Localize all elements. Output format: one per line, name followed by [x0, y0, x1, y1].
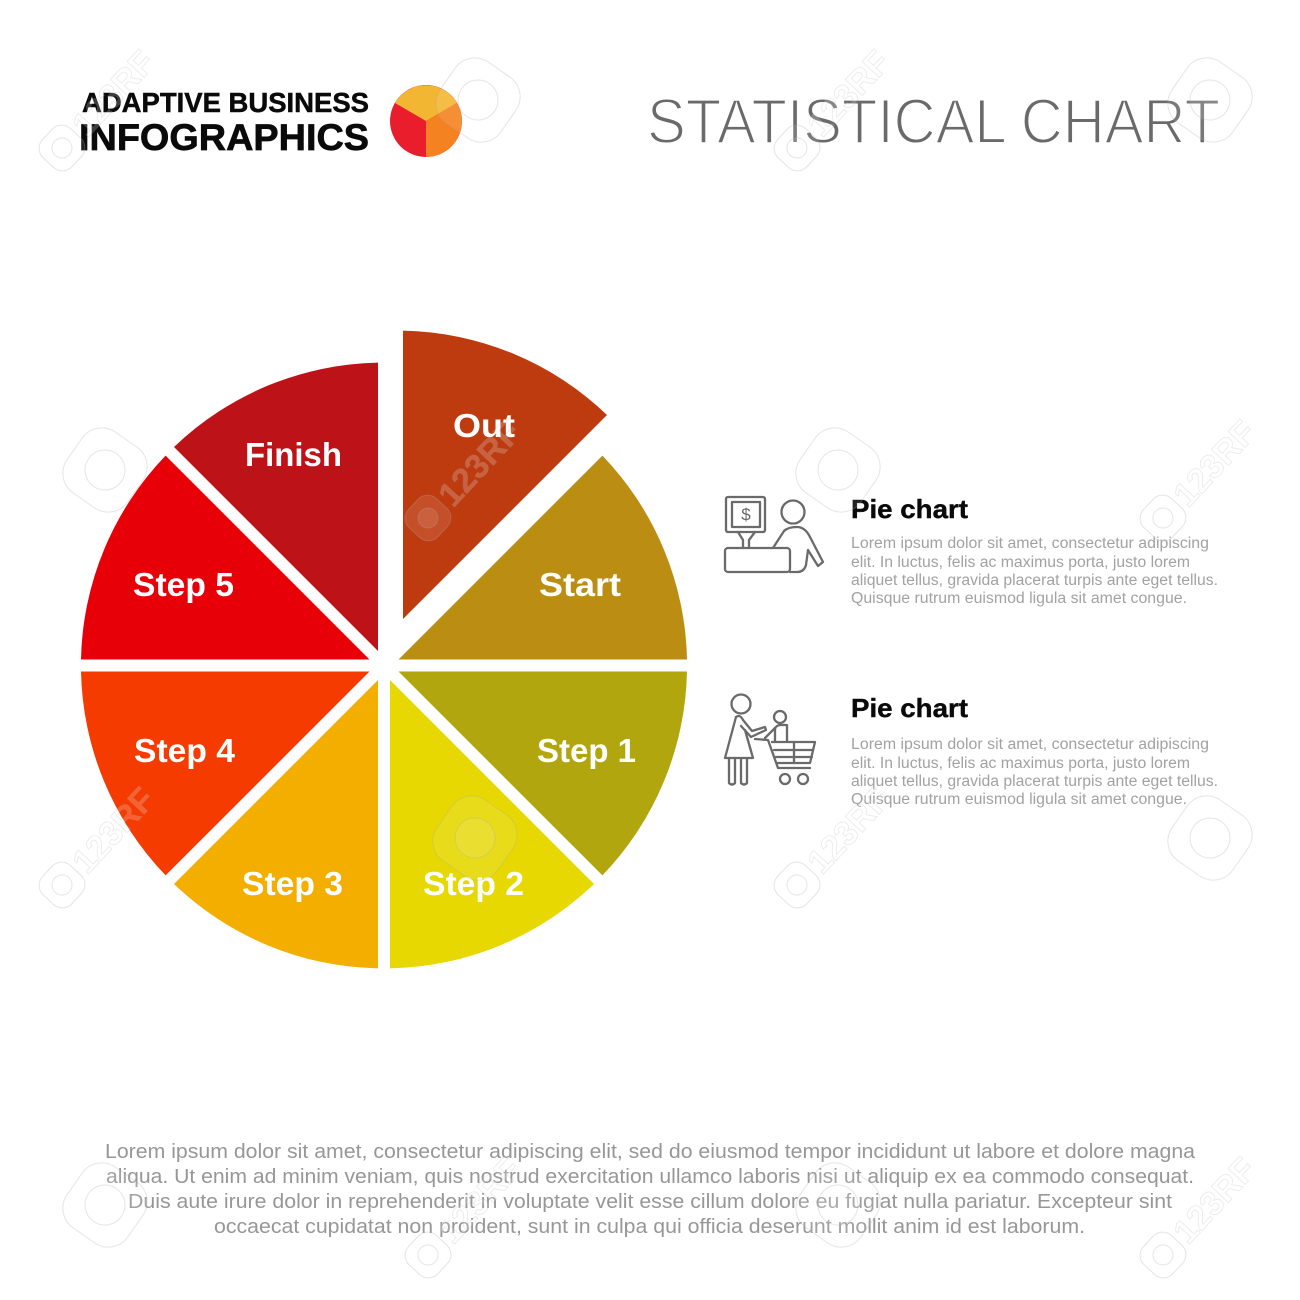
logo heading: Adaptive Business Infographics — [79, 87, 369, 158]
text block: second pie chart note: Quisque rutrum euismod ligula sit amet congue. — [851, 791, 1187, 808]
text block: second pie chart note: aliquet tellus, gravida placerat turpis ante eget tellus. — [851, 773, 1218, 790]
icon: shopper with child in cart — [725, 694, 815, 784]
slice: Step 3 — [174, 680, 378, 968]
text block: second pie chart note: Lorem ipsum dolor sit amet, consectetur adipiscing — [851, 736, 1209, 753]
slice: Step 2: Step 2 — [423, 865, 524, 902]
slice: Step 2 — [390, 680, 594, 968]
text block: first pie chart note: aliquet tellus, gravida placerat turpis ante eget tellus. — [851, 572, 1218, 589]
text block: first pie chart note: Quisque rutrum euismod ligula sit amet congue. — [851, 590, 1187, 607]
slice: Finish: Finish — [245, 436, 342, 473]
watermark stamps: 123RF — [65, 781, 163, 881]
logo heading: Adaptive Business Infographics: ADAPTIVE BUSINESS — [82, 87, 369, 118]
text block: footer paragraph: Lorem ipsum dolor sit amet, consectetur adipiscing elit, sed do eiusmod tempor incididunt ut labore et dolore magna — [105, 1141, 1196, 1163]
watermark stamps: 123RF — [431, 414, 529, 514]
slice: Step 3: Step 3 — [242, 865, 343, 902]
slice: Step 4 — [81, 672, 370, 875]
slice: Step 1: Step 1 — [537, 732, 636, 769]
text block: second pie chart note: Pie chart — [851, 693, 968, 723]
watermark stamps: 123RF — [431, 1151, 529, 1251]
title: Statistical Chart: STATISTICAL CHART — [647, 87, 1220, 157]
text block: second pie chart note — [851, 693, 1218, 808]
slice: Start — [398, 456, 687, 660]
watermark stamps: 123RF — [800, 781, 898, 881]
slice: Start: Start — [539, 566, 621, 603]
watermark stamps: 123RF — [65, 44, 163, 144]
text block: first pie chart note: elit. In luctus, felis ac maximus porta, justo lorem — [851, 554, 1190, 571]
slice: Step 4: Step 4 — [134, 732, 236, 769]
text block: first pie chart note — [851, 494, 1218, 607]
text block: footer paragraph: Duis aute irure dolor in reprehenderit in voluptate velit esse cillum dolore eu fugiat nulla pariatur. Excepteur sint — [128, 1191, 1172, 1213]
text block: first pie chart note: Pie chart — [851, 494, 968, 524]
watermark stamps: 123RF — [800, 44, 898, 144]
slice: Out: Out — [453, 407, 515, 444]
slice: Step 1 — [398, 672, 687, 875]
slice: Step 5: Step 5 — [133, 566, 234, 603]
icon: logo pie — [390, 85, 462, 157]
text block: second pie chart note: elit. In luctus, felis ac maximus porta, justo lorem — [851, 755, 1190, 772]
text block: footer paragraph: aliqua. Ut enim ad minim veniam, quis nostrud exercitation ullamco laboris nisi ut aliquip ex ea commodo consequat. — [106, 1166, 1194, 1188]
text block: footer paragraph: occaecat cupidatat non proident, sunt in culpa qui officia deserunt mollit anim id est laborum. — [214, 1216, 1085, 1238]
pie chart — [81, 331, 687, 968]
text block: first pie chart note: Lorem ipsum dolor sit amet, consectetur adipiscing — [851, 535, 1209, 552]
slice: Out — [403, 331, 607, 619]
icon: cashier at register — [725, 497, 823, 572]
logo heading: Adaptive Business Infographics: INFOGRAPHICS — [79, 117, 369, 158]
icon: cashier at register: $ — [741, 505, 751, 524]
text block: footer paragraph — [105, 1141, 1196, 1238]
slice: Finish — [174, 363, 378, 651]
slice: Step 5 — [81, 456, 370, 660]
watermark stamps: 123RF — [1166, 414, 1264, 514]
watermark stamps: 123RF — [1166, 1151, 1264, 1251]
